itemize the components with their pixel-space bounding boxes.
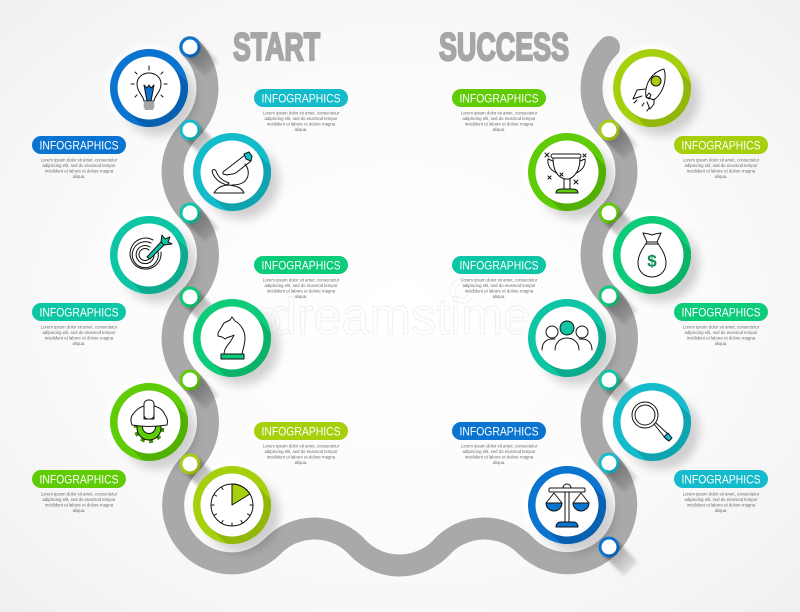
node: right 1	[598, 120, 620, 140]
body text: incididunt ut labore et dolore magna	[267, 288, 336, 294]
body text: incididunt ut labore et dolore magna	[687, 168, 756, 174]
body text: Lorem ipsum dolor sit amet, consectetur	[263, 110, 340, 116]
body text: aliqua.	[295, 294, 307, 299]
node: left 2	[180, 120, 200, 140]
body text: Lorem ipsum dolor sit amet, consectetur	[263, 444, 340, 448]
body text: adipiscing elit, sed do eiusmod tempor	[264, 116, 338, 121]
pill label: INFOGRAPHICS	[460, 92, 538, 106]
pill label: INFOGRAPHICS	[40, 472, 118, 486]
circle shadows	[120, 59, 699, 552]
body text: incididunt ut labore et dolore magna	[267, 122, 336, 126]
panel: right column, block 1	[674, 136, 768, 179]
body text: adipiscing elit, sed do eiusmod tempor	[264, 283, 338, 288]
node: left 3	[180, 202, 200, 224]
body text: aliqua.	[73, 508, 85, 513]
winding road	[173, 47, 627, 565]
icon: light bulb	[131, 66, 167, 109]
node shadows	[183, 40, 638, 576]
body text: incididunt ut labore et dolore magna	[687, 502, 756, 508]
body text: aliqua.	[493, 127, 505, 132]
body text: Lorem ipsum dolor sit amet, consectetur	[41, 158, 118, 162]
panel: third column, block 1	[452, 89, 546, 132]
body text: Lorem ipsum dolor sit amet, consectetur	[41, 324, 118, 330]
icon: microscope	[212, 152, 252, 193]
badge: people	[528, 299, 606, 377]
body text: Lorem ipsum dolor sit amet, consectetur	[683, 492, 760, 496]
badge: trophy	[528, 133, 606, 211]
node: right 2	[598, 202, 620, 224]
badge: helmet and gear	[110, 383, 188, 461]
body text: adipiscing elit, sed do eiusmod tempor	[462, 449, 536, 454]
badge: money bag	[613, 216, 691, 294]
pill label: INFOGRAPHICS	[460, 424, 538, 438]
body text: adipiscing elit, sed do eiusmod tempor	[684, 497, 758, 502]
panel: third column, block 2	[452, 256, 546, 299]
title: START: START	[233, 26, 320, 69]
body text: aliqua.	[493, 294, 505, 299]
icon: target and dart	[130, 235, 172, 269]
body text: aliqua.	[493, 460, 505, 465]
badge: rocket	[613, 49, 691, 127]
node: right 5	[598, 452, 620, 474]
body text	[41, 158, 118, 179]
panel: left column, block 2	[32, 303, 126, 346]
body text: adipiscing elit, sed do eiusmod tempor	[264, 449, 338, 454]
node: right 3	[598, 286, 620, 306]
icon: chess knight	[218, 317, 245, 359]
pill label: INFOGRAPHICS	[40, 138, 118, 152]
badge: magnifier	[613, 383, 691, 461]
node: left 1	[180, 36, 200, 58]
body text: aliqua.	[73, 341, 85, 346]
body text	[683, 324, 760, 346]
body text	[263, 110, 340, 132]
body text	[461, 110, 538, 132]
badge: target	[110, 216, 188, 294]
badge: microscope	[193, 133, 271, 211]
body text: aliqua.	[715, 174, 727, 179]
panel: left column, block 3	[32, 470, 126, 513]
pill label: INFOGRAPHICS	[460, 258, 538, 272]
panel: right column, block 3	[674, 470, 768, 513]
panel: right column, block 2	[674, 303, 768, 346]
body text: Lorem ipsum dolor sit amet, consectetur	[263, 278, 340, 282]
body text: aliqua.	[295, 127, 307, 132]
body text: adipiscing elit, sed do eiusmod tempor	[684, 330, 758, 335]
badge: chess knight	[193, 299, 271, 377]
badge: light bulb	[110, 49, 188, 127]
body text: adipiscing elit, sed do eiusmod tempor	[462, 283, 536, 288]
body text: incididunt ut labore et dolore magna	[687, 336, 756, 340]
pill label: INFOGRAPHICS	[682, 138, 760, 152]
body text	[41, 492, 118, 513]
body text: incididunt ut labore et dolore magna	[45, 502, 114, 508]
body text: incididunt ut labore et dolore magna	[465, 122, 534, 126]
panel: second column, block 1	[254, 89, 348, 132]
panel: third column, block 3	[452, 422, 546, 465]
icon: magnifying glass	[632, 402, 672, 441]
body text: aliqua.	[715, 341, 727, 346]
node: right 4	[598, 370, 620, 390]
pill label: INFOGRAPHICS	[682, 306, 760, 320]
pill label: INFOGRAPHICS	[682, 472, 760, 486]
body text: Lorem ipsum dolor sit amet, consectetur	[683, 324, 760, 330]
icon: rocket	[633, 69, 665, 111]
body text	[683, 492, 760, 513]
body text: aliqua.	[73, 174, 85, 179]
body text: Lorem ipsum dolor sit amet, consectetur	[41, 492, 118, 496]
title: SUCCESS: SUCCESS	[439, 26, 569, 69]
icon: clock with wedge	[211, 484, 253, 526]
icon: three people	[542, 321, 592, 350]
panel: second column, block 3	[254, 422, 348, 465]
pill label: INFOGRAPHICS	[262, 92, 340, 106]
body text: Lorem ipsum dolor sit amet, consectetur	[461, 444, 538, 448]
body text: incididunt ut labore et dolore magna	[45, 168, 114, 174]
white halos behind circles	[105, 44, 696, 549]
watermark: dreamstime	[269, 288, 531, 346]
icon: dollar sign: $	[647, 252, 657, 270]
body text	[683, 158, 760, 179]
body text	[461, 444, 538, 465]
body text: adipiscing elit, sed do eiusmod tempor	[684, 163, 758, 168]
icon: trophy	[545, 153, 586, 193]
body text: aliqua.	[295, 460, 307, 465]
body text	[263, 278, 340, 299]
body text: adipiscing elit, sed do eiusmod tempor	[462, 116, 536, 121]
pill label: INFOGRAPHICS	[262, 258, 340, 272]
badge: scales	[528, 466, 606, 544]
body text: adipiscing elit, sed do eiusmod tempor	[42, 330, 116, 335]
body text	[461, 278, 538, 299]
body text: incididunt ut labore et dolore magna	[267, 454, 336, 460]
node: left 6	[180, 454, 200, 474]
body text: incididunt ut labore et dolore magna	[465, 454, 534, 460]
body text: Lorem ipsum dolor sit amet, consectetur	[461, 110, 538, 116]
panel: left column, block 1	[32, 136, 126, 179]
badge: clock	[193, 466, 271, 544]
pill label: INFOGRAPHICS	[262, 424, 340, 438]
node: left 4	[180, 286, 200, 308]
body text: incididunt ut labore et dolore magna	[45, 336, 114, 340]
body text: Lorem ipsum dolor sit amet, consectetur	[461, 278, 538, 282]
pill label: INFOGRAPHICS	[40, 306, 118, 320]
body text: aliqua.	[715, 508, 727, 513]
node: left 5	[180, 370, 200, 390]
body text: Lorem ipsum dolor sit amet, consectetur	[683, 158, 760, 162]
icon: helmet and gear	[131, 400, 168, 442]
body text	[41, 324, 118, 346]
panel: second column, block 2	[254, 256, 348, 299]
icon: balance scales	[546, 484, 589, 527]
icon: money bag	[638, 233, 666, 277]
body text: adipiscing elit, sed do eiusmod tempor	[42, 163, 116, 168]
body text	[263, 444, 340, 465]
body text: incididunt ut labore et dolore magna	[465, 288, 534, 294]
body text: adipiscing elit, sed do eiusmod tempor	[42, 497, 116, 502]
node: right 6	[598, 536, 620, 558]
